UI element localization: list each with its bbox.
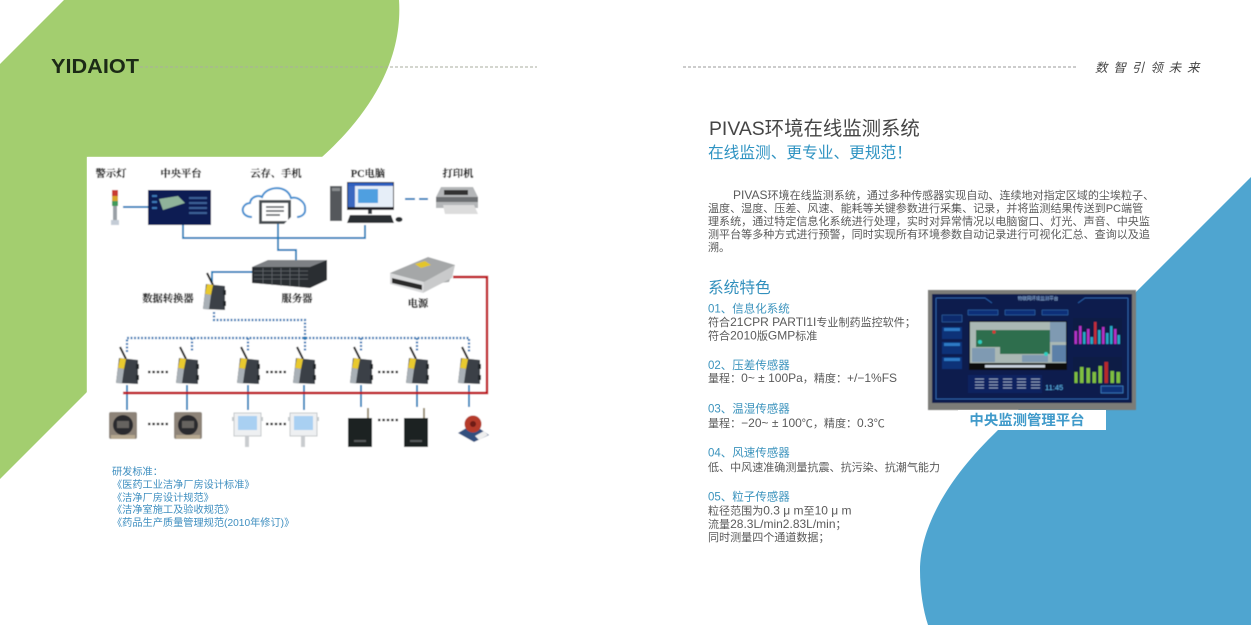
label: 服务器: 服务器: [282, 292, 313, 305]
panel: system architecture diagram: [87, 157, 497, 487]
feature 01: 符合21CPR PARTI1I专业制药监控软件；: [708, 315, 916, 329]
screen clock: 11:45: [1045, 383, 1063, 392]
icon: server: [252, 260, 327, 288]
feature 05: [708, 490, 852, 544]
connection lines: dotted wireless: [127, 312, 469, 352]
feature 01: 符合2010版GMP标准: [708, 328, 817, 342]
feature 01: [708, 302, 916, 342]
screen title: 物联网环境监测平台: [1018, 295, 1059, 302]
feature 02: 量程：0~ ± 100Pa，精度：+/−1%FS: [708, 371, 897, 385]
screen bottom bar chart: [1073, 357, 1122, 383]
text block: intro paragraph: PIVAS环境在线监测系统，通过多种传感器实现自动、连续地对指定区域的尘埃粒子、: [733, 188, 1154, 202]
arrow: PC to printer dashed link: [405, 198, 428, 200]
label: 电源: 电源: [408, 297, 429, 310]
heading: 系统特色: 系统特色: [708, 279, 771, 297]
text block: R&D standards: 研发标准：: [112, 465, 163, 478]
subtitle: 在线监测、更专业、更规范！: [708, 144, 912, 162]
feature 05: 同时测量四个通道数据；: [708, 530, 830, 544]
text block: R&D standards: 《洁净室施工及验收规范》: [112, 503, 234, 516]
screen frame lines: [936, 298, 1128, 399]
screen floor plan: [969, 321, 1067, 370]
screen top bar chart: [1073, 318, 1122, 344]
feature 04: 低、中风速准确测量抗震、抗污染、抗潮气能力: [708, 460, 940, 474]
feature 02: 02、压差传感器: [708, 358, 790, 372]
text block: R&D standards: 《医药工业洁净厂房设计标准》: [112, 478, 255, 491]
feature 03: 量程：−20~ ± 100℃，精度：0.3℃: [708, 416, 885, 430]
icon: cloud with document: [243, 188, 305, 224]
feature 04: [708, 446, 940, 474]
feature 05: 流量28.3L/min2.83L/min；: [708, 517, 847, 531]
text block: intro paragraph: 理系统，通过特定信息化系统进行处理，实时对异常情况以电脑窗口、灯光、声音、中央监: [708, 214, 1150, 228]
icon: PC: [330, 182, 402, 223]
icon: printer: [436, 187, 478, 214]
screen data table: [968, 375, 1042, 393]
label: PC电脑: PC电脑: [351, 167, 385, 180]
row: wireless modules: [116, 347, 481, 384]
background shape: green corner: [0, 0, 399, 479]
text block: intro paragraph: 温度、湿度、压差、风速、能耗等关键参数进行采集、记录，并将监测结果传送到PC端管: [708, 201, 1143, 215]
feature 02: [708, 358, 897, 385]
feature 05: 粒径范围为0.3 μ m至10 μ m: [708, 504, 852, 518]
screen button: [1101, 386, 1123, 393]
icon: warning light: [111, 190, 119, 225]
connection lines: blue network: [123, 207, 469, 410]
screen top tabs: [968, 310, 1068, 315]
icon: current transformer: [458, 416, 489, 442]
label: 打印机: 打印机: [443, 167, 474, 180]
caption: central monitoring platform: 中央监测管理平台: [969, 411, 1085, 429]
logo: YIDAIOT: YIDAIOT: [51, 56, 139, 78]
screen left status cards: [942, 315, 962, 369]
label: 云存、手机: 云存、手机: [250, 167, 302, 180]
row: sensors: [109, 408, 489, 447]
feature 05: 05、粒子传感器: [708, 490, 790, 504]
icon: central platform screen: [148, 190, 211, 225]
background shape: blue corner: [920, 177, 1251, 625]
feature 04: 04、风速传感器: [708, 446, 790, 460]
feature 03: 03、温湿传感器: [708, 402, 790, 416]
text block: R&D standards: [112, 465, 294, 529]
title: PIVAS环境在线监测系统: [709, 118, 920, 140]
label: 数据转换器: 数据转换器: [142, 292, 194, 305]
text block: intro paragraph: 溯。: [708, 241, 730, 254]
text block: R&D standards: 《药品生产质量管理规范(2010年修订)》: [112, 516, 294, 529]
label: 警示灯: 警示灯: [96, 167, 127, 180]
text block: R&D standards: 《洁净厂房设计规范》: [112, 491, 214, 504]
caption: central monitoring platform: [958, 410, 1106, 430]
feature 01: 01、信息化系统: [708, 302, 790, 316]
connection lines: red power: [123, 277, 487, 393]
panel: central monitoring screen: [928, 290, 1136, 410]
icon: data converter: [203, 273, 226, 310]
slogan: 数智引领未来: [1095, 61, 1205, 75]
text block: intro paragraph: [708, 188, 1154, 254]
right header dashed rule: [683, 66, 1078, 68]
label: 中央平台: 中央平台: [160, 167, 202, 180]
text block: intro paragraph: 测平台等多种方式进行预警，同时实现所有环境参数自动记录进行可视化汇总、查询以及追: [708, 227, 1150, 241]
icon: power supply: [390, 257, 455, 293]
left header dashed rule: [140, 66, 537, 68]
feature 03: [708, 402, 885, 430]
ellipsis marks: [148, 372, 398, 424]
